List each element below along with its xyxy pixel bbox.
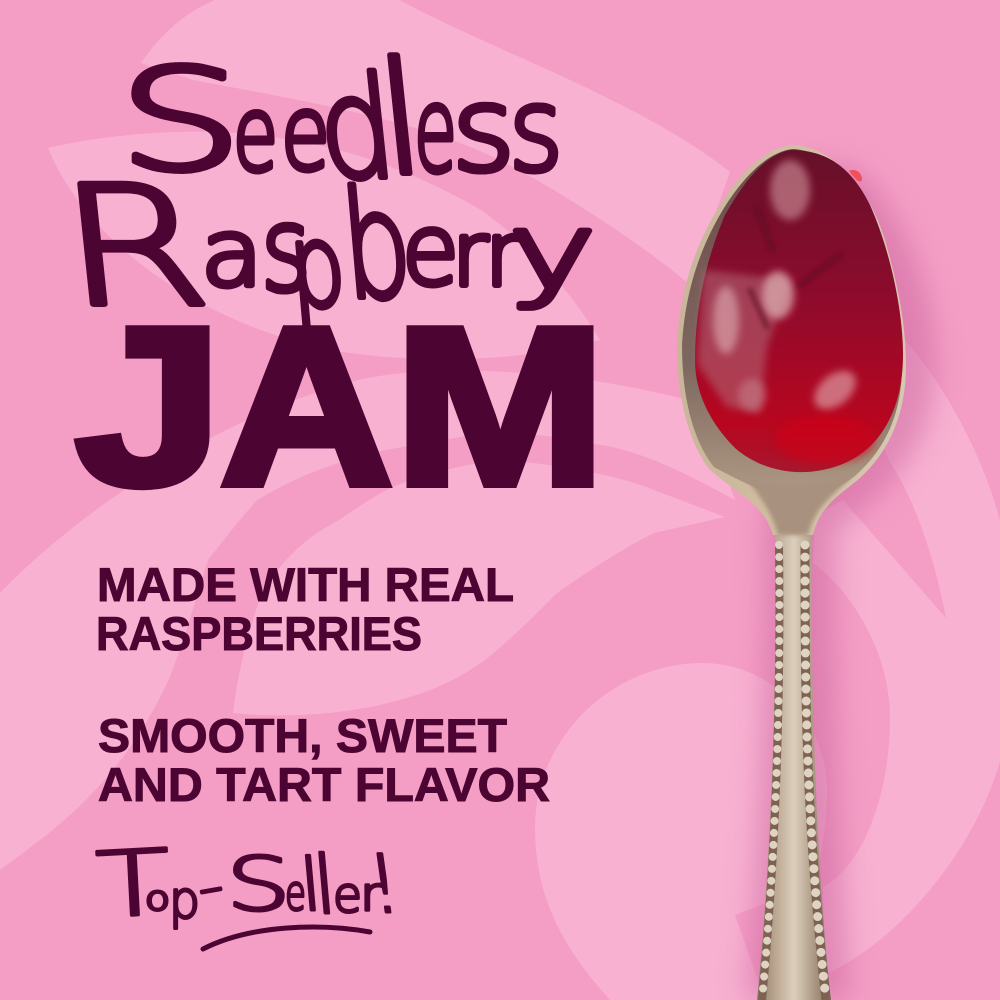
callout text: l (297, 844, 325, 928)
spoon (677, 145, 906, 1000)
callout underline (203, 927, 370, 949)
title: Seedless Raspberry JAM (52, 29, 606, 532)
claim: smooth, sweet and tart flavor: SMOOTH, SWEET (98, 709, 507, 762)
jam highlights (697, 160, 863, 417)
heading script: Raspberry: a (201, 199, 263, 307)
heading script: Raspberry: p (284, 200, 350, 334)
heading bold: JAM: M (394, 280, 606, 532)
text block: claims (96, 558, 550, 811)
spoon shadow (745, 160, 936, 1000)
heading script: Raspberry: y (509, 191, 596, 313)
heading script: Seedless: S (118, 40, 243, 203)
jam drip (849, 170, 862, 182)
heading script: Seedless: e (281, 74, 330, 194)
callout text: p (169, 871, 200, 931)
jam glow (775, 416, 875, 464)
claim: made with real raspberries: MADE WITH REAL (97, 558, 514, 611)
callout: Top-Seller (94, 830, 407, 949)
heading script: Raspberry (52, 151, 596, 344)
heading bold: JAM: J (75, 280, 223, 532)
heading script: Seedless: d (310, 48, 403, 211)
claim: smooth, sweet and tart flavor (98, 709, 550, 811)
callout text (94, 830, 407, 939)
claim: smooth, sweet and tart flavor: AND TART FLAVOR (98, 758, 550, 811)
heading script: Raspberry: b (335, 159, 418, 332)
callout text: l (310, 839, 340, 932)
claim: made with real raspberries (96, 558, 514, 660)
spoon bowl (677, 145, 906, 535)
heading script: Raspberry: r (485, 203, 522, 306)
heading bold: JAM (75, 280, 606, 532)
spoon handle (757, 520, 831, 1000)
heading bold: JAM: A (220, 280, 393, 532)
heading script: Raspberry: r (452, 203, 489, 306)
callout text: T (94, 830, 173, 939)
heading script: Raspberry: e (402, 194, 459, 308)
heading script: Seedless: l (370, 29, 432, 210)
heading script: Raspberry: R (52, 151, 217, 344)
jam (695, 150, 903, 472)
heading script: Raspberry: s (261, 183, 311, 318)
callout text: o (145, 879, 170, 919)
heading script: Seedless: e (233, 75, 278, 195)
callout text: ! (362, 837, 407, 931)
callout text: r (360, 867, 382, 921)
callout text: S (226, 842, 291, 928)
callout text: e (285, 865, 306, 922)
callout text: e (333, 867, 362, 924)
callout text: - (194, 858, 228, 916)
heading script: Seedless: s (452, 63, 515, 198)
heading script: Seedless: s (509, 64, 563, 198)
heading script: Seedless (118, 29, 563, 211)
claim: made with real raspberries: RASPBERRIES (96, 607, 422, 660)
heading script: Seedless: e (414, 61, 457, 199)
